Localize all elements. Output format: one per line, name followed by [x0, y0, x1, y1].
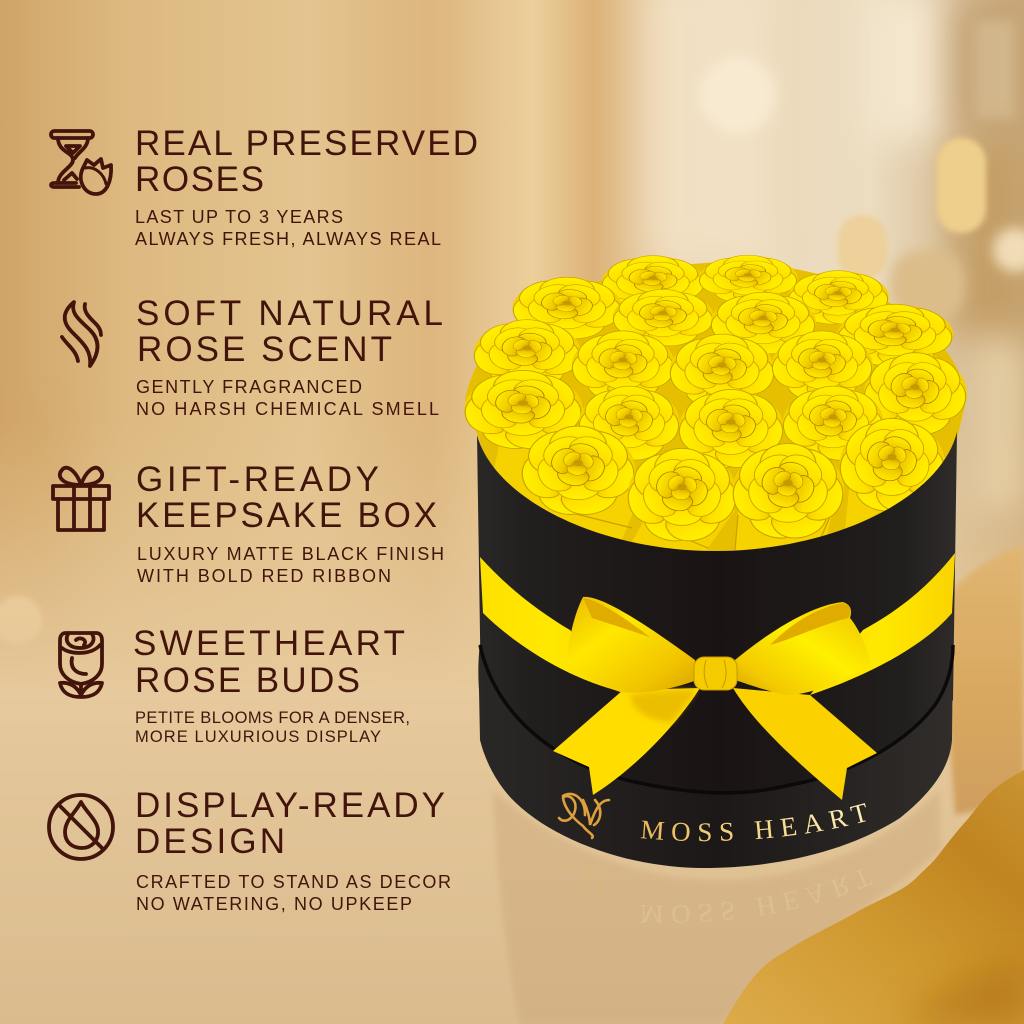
icon: hourglass and rose: [51, 131, 111, 194]
feature 2: soft natural rose scent: [62, 294, 443, 419]
ribbon left tail: [553, 688, 700, 795]
rose bouquet: [461, 254, 970, 552]
satin fabric: [723, 770, 1024, 1024]
table reflection of box: MOSS HEART: [640, 869, 873, 923]
feature 1: real preserved roses: [51, 124, 478, 249]
ribbon knot: [694, 657, 737, 690]
feature 4: sweetheart rose buds: [60, 624, 410, 746]
ribbon left loop: [567, 597, 697, 693]
heading: REAL PRESERVED: [135, 124, 478, 163]
feature 2: soft natural rose scent: NO HARSH CHEMICAL SMELL: [136, 399, 439, 419]
description: CRAFTED TO STAND AS DECOR: [136, 872, 451, 892]
feature 5: display-ready design: NO WATERING, NO UPKEEP: [136, 894, 412, 914]
yellow ribbon band: [480, 557, 623, 692]
icon: gift box: [53, 468, 109, 530]
feature 1: real preserved roses: ALWAYS FRESH, ALWAYS REAL: [135, 229, 441, 249]
background satin behind box: [950, 545, 1024, 815]
feature 3: gift-ready keepsake box: WITH BOLD RED RIBBON: [137, 566, 391, 586]
description: LUXURY MATTE BLACK FINISH: [137, 544, 444, 564]
brand name: [640, 818, 877, 841]
feature 4: sweetheart rose buds: ROSE BUDS: [135, 661, 360, 700]
feature 2: soft natural rose scent: ROSE SCENT: [137, 330, 392, 369]
feature 1: real preserved roses: ROSES: [135, 160, 264, 199]
logo monogram: [559, 794, 609, 838]
feature 5: display-ready design: [49, 786, 451, 914]
icon: no water drop: [49, 795, 113, 859]
feature 4: sweetheart rose buds: MORE LUXURIOUS DISPLAY: [135, 728, 381, 746]
feature 3: gift-ready keepsake box: KEEPSAKE BOX: [136, 496, 437, 535]
ribbon right tail: [733, 688, 877, 800]
heading: SWEETHEART: [133, 624, 405, 663]
description: PETITE BLOOMS FOR A DENSER,: [135, 709, 410, 727]
description: LAST UP TO 3 YEARS: [135, 207, 343, 227]
product: black box with yellow roses: MOSS HEART: [640, 803, 866, 842]
table reflection of box: [494, 796, 939, 1021]
heading: DISPLAY-READY: [135, 786, 445, 825]
box body: [477, 432, 957, 800]
description: GENTLY FRAGRANCED: [136, 377, 362, 397]
heading: SOFT NATURAL: [136, 294, 443, 333]
product: black box with yellow roses: [464, 255, 967, 868]
rose stems fill: [465, 262, 966, 552]
ribbon right loop: [735, 602, 870, 695]
box lid: [478, 643, 953, 868]
feature 3: gift-ready keepsake box: [53, 460, 444, 586]
heading: GIFT-READY: [136, 460, 379, 499]
icon: scent waves: [62, 302, 101, 366]
icon: rose bud: [60, 633, 102, 697]
feature 5: display-ready design: DESIGN: [135, 822, 285, 861]
